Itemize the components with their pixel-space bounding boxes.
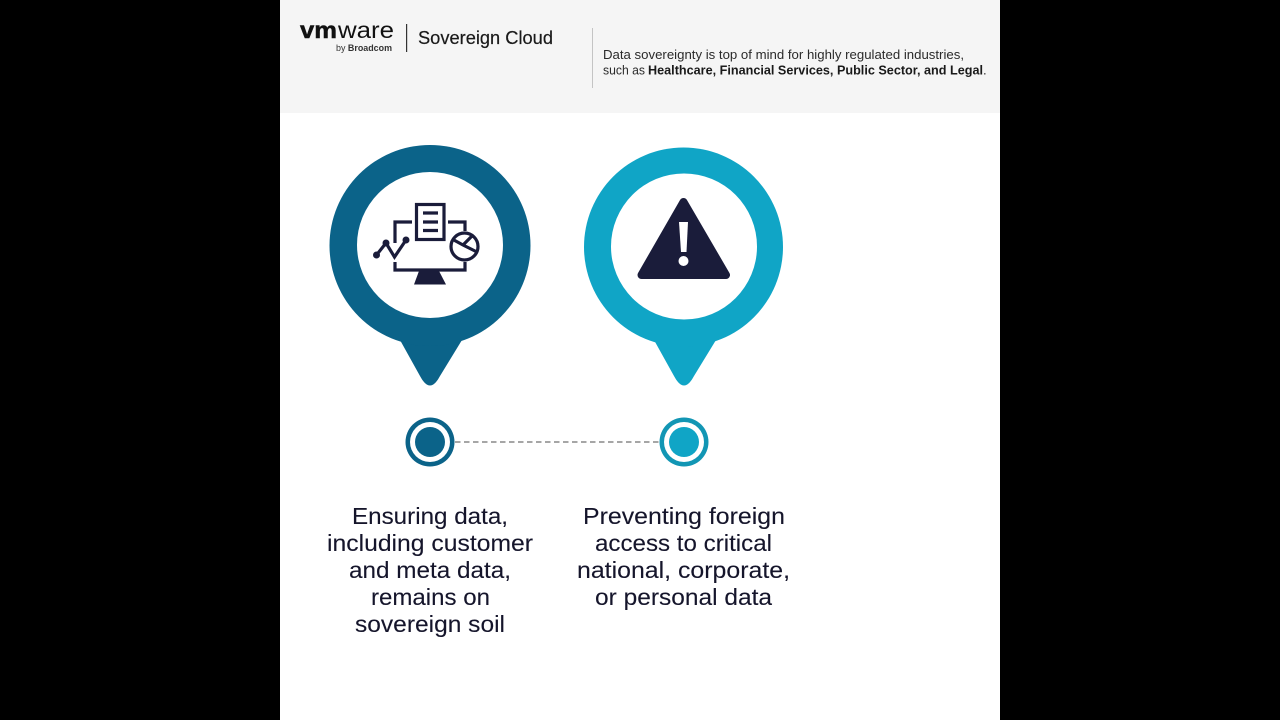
vmware by Broadcom logo: by Broadcom — [336, 43, 392, 54]
logo divider — [406, 24, 407, 52]
monitor outline segments — [395, 222, 465, 270]
pie chart — [451, 233, 478, 260]
text block: ensuring data: including customer — [327, 530, 533, 556]
text block: ensuring data — [327, 503, 533, 637]
pin: foreign access — [584, 148, 783, 386]
text block: preventing foreign access: national, corporate, — [577, 557, 790, 583]
header description: such as — [603, 62, 645, 78]
icon: monitor with document, line chart and pie chart — [373, 204, 478, 284]
header panel — [280, 0, 1000, 113]
document — [416, 204, 444, 240]
text block: preventing foreign access: or personal data — [595, 584, 772, 610]
header description: . — [983, 62, 987, 78]
vmware by Broadcom logo — [300, 17, 394, 54]
header divider — [592, 28, 593, 88]
text block: preventing foreign access: Preventing foreign — [583, 503, 785, 529]
white content panel — [280, 0, 1000, 720]
text block: ensuring data: remains on — [371, 584, 490, 610]
header description: Data sovereignty is top of mind for highly regulated industries, — [603, 47, 964, 62]
text block: ensuring data: sovereign soil — [355, 611, 505, 637]
text block: preventing foreign access: access to critical — [595, 530, 772, 556]
header description — [603, 47, 987, 78]
vmware by Broadcom logo: ware — [337, 17, 394, 43]
line chart — [376, 240, 406, 257]
icon: warning triangle — [642, 202, 726, 275]
header description: Healthcare, Financial Services, Public Sector, and Legal — [648, 62, 983, 78]
timeline connector — [455, 441, 660, 443]
timeline node 1 — [406, 418, 454, 466]
timeline node 2 — [660, 418, 708, 466]
pin: data residency — [330, 145, 530, 386]
monitor stand — [414, 271, 446, 284]
vmware by Broadcom logo: vm — [300, 17, 337, 43]
text block: ensuring data: Ensuring data, — [352, 503, 508, 529]
header title: Sovereign Cloud — [418, 28, 553, 48]
text block: ensuring data: and meta data, — [349, 557, 511, 583]
text block: preventing foreign access — [577, 503, 790, 610]
